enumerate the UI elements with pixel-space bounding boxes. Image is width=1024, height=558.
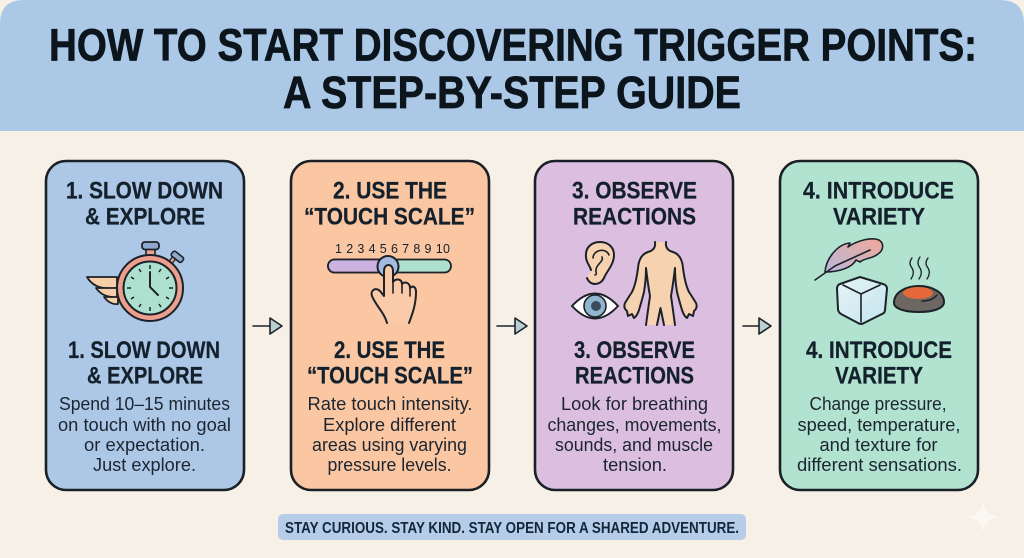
heading: step 1 <box>66 178 223 230</box>
heading: step 3 repeated: 3. OBSERVE <box>574 337 695 364</box>
heading: step 4 <box>803 178 954 230</box>
icon: ice cube <box>837 277 887 324</box>
text: step 4 body: and texture for <box>820 435 938 455</box>
title: A STEP-BY-STEP GUIDE <box>283 67 741 118</box>
heading: step 1 repeated <box>68 337 220 390</box>
heading: step 2 repeated: “TOUCH SCALE” <box>307 362 473 390</box>
text: step 4 body: speed, temperature, <box>798 415 960 435</box>
heading: step 2: 2. USE THE <box>333 178 447 204</box>
arrow 2 <box>497 318 527 334</box>
decorative sparkle <box>968 502 998 532</box>
text: step 4 body: different sensations. <box>797 455 962 475</box>
text: step 1 body: Spend 10–15 minutes <box>59 394 230 414</box>
text: step 2 body: Rate touch intensity. <box>308 394 472 414</box>
heading: step 4 repeated: VARIETY <box>835 362 923 390</box>
heading: step 1 repeated: & EXPLORE <box>87 362 203 390</box>
panel: step 4 <box>780 161 978 490</box>
title <box>49 20 977 118</box>
heading: step 1: 1. SLOW DOWN <box>66 178 223 204</box>
heading: step 1 repeated: 1. SLOW DOWN <box>68 337 220 364</box>
icon: feather <box>815 239 883 280</box>
text: step 2 body <box>308 394 472 475</box>
arrow 1 <box>253 318 282 334</box>
heading: step 4: VARIETY <box>833 204 925 230</box>
heading: step 2 repeated <box>307 337 473 390</box>
panel: step 3 <box>535 161 733 490</box>
panel: step 1 <box>46 161 244 490</box>
heading: step 2 <box>304 178 475 230</box>
icon: hot stone <box>894 257 944 312</box>
text: step 2 body: Explore different <box>323 415 456 435</box>
text: step 3 body: sounds, and muscle <box>555 435 713 455</box>
text: step 1 body: on touch with no goal <box>58 415 231 435</box>
heading: step 2 repeated: 2. USE THE <box>334 337 445 364</box>
arrow 3 <box>743 318 771 334</box>
heading: step 4 repeated: 4. INTRODUCE <box>806 337 952 364</box>
heading: step 4 repeated <box>806 337 952 390</box>
text: step 2 body: areas using varying <box>312 435 467 455</box>
text: step 4 body <box>797 394 962 475</box>
heading: step 3 repeated: REACTIONS <box>575 362 694 390</box>
icon: touch scale slider <box>328 242 451 323</box>
heading: step 2: “TOUCH SCALE” <box>304 204 475 230</box>
heading: step 1: & EXPLORE <box>85 204 205 230</box>
text: step 3 body: Look for breathing <box>561 394 708 414</box>
text: step 3 body: changes, movements, <box>548 415 722 435</box>
footer callout: STAY CURIOUS. STAY KIND. STAY OPEN FOR A SHARED ADVENTURE. <box>285 520 739 537</box>
heading: step 4: 4. INTRODUCE <box>803 178 954 204</box>
heading: step 3: REACTIONS <box>573 204 696 230</box>
panel: step 2 <box>291 161 489 490</box>
text: step 1 body <box>58 394 231 475</box>
icon: winged stopwatch <box>87 242 184 321</box>
text: step 3 body <box>548 394 722 475</box>
text: step 2 body: pressure levels. <box>328 455 452 475</box>
footer callout <box>278 514 746 540</box>
text: step 4 body: Change pressure, <box>810 394 946 414</box>
icon: body <box>624 242 697 325</box>
header banner <box>0 0 1024 131</box>
heading: step 3: 3. OBSERVE <box>572 178 697 204</box>
icon: touch scale slider: 1 2 3 4 5 6 7 8 9 10 <box>335 242 450 256</box>
text: step 3 body: tension. <box>603 455 667 475</box>
icon: eye <box>572 294 618 318</box>
text: step 1 body: or expectation. <box>84 435 205 455</box>
icon: ear <box>586 242 614 284</box>
heading: step 3 <box>572 178 697 230</box>
heading: step 3 repeated <box>574 337 695 390</box>
text: step 1 body: Just explore. <box>93 455 196 475</box>
